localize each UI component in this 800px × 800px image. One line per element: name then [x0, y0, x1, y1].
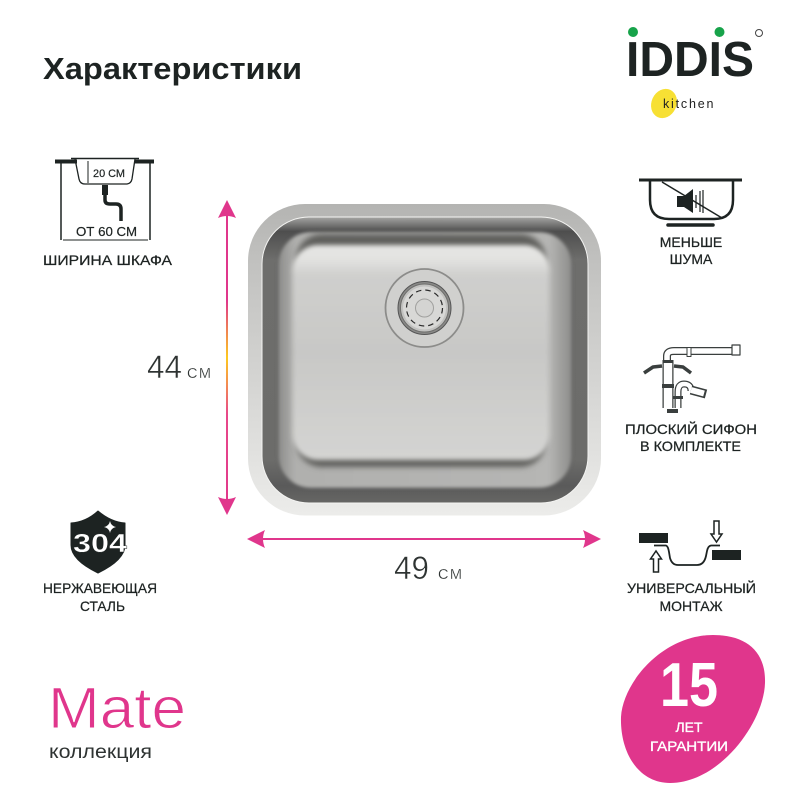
collection name: Mate — [48, 676, 186, 741]
arrow: depth 44 cm — [218, 200, 236, 515]
warranty badge: 15 — [660, 651, 718, 720]
collection name — [48, 676, 186, 763]
label: universal mounting: МОНТАЖ — [659, 598, 723, 614]
arrow: width 49 cm — [247, 530, 601, 548]
icon: flat siphon — [644, 345, 740, 413]
warranty badge: ЛЕТ — [675, 719, 703, 735]
label: universal mounting — [627, 579, 756, 614]
icon: less noise — [639, 180, 742, 225]
title: Характеристики — [43, 51, 302, 86]
label: 49 cm: СМ — [438, 567, 462, 583]
label: 44 cm: СМ — [187, 366, 211, 382]
icon: 304 shield — [71, 511, 128, 573]
label: less noise — [660, 234, 722, 267]
warranty badge: ГАРАНТИИ — [650, 738, 728, 754]
label: less noise: МЕНЬШЕ — [660, 234, 722, 250]
label: flat siphon: ПЛОСКИЙ СИФОН — [625, 420, 757, 437]
warranty badge — [621, 635, 765, 783]
label: less noise: ШУМА — [670, 251, 713, 267]
label: stainless steel: НЕРЖАВЕЮЩАЯ — [43, 580, 157, 596]
icon: cabinet width: 20 СМ — [93, 168, 125, 180]
overflow slot — [406, 220, 443, 222]
label: stainless steel: СТАЛЬ — [80, 598, 125, 614]
sink inner edge — [262, 217, 588, 503]
icon: universal mounting — [639, 521, 741, 572]
collection name: коллекция — [49, 742, 152, 763]
label: 49 cm: 49 — [394, 550, 429, 586]
sink illustration — [248, 204, 601, 516]
label: 44 cm — [147, 349, 211, 385]
sink bowl layers — [262, 217, 588, 503]
label: flat siphon: В КОМПЛЕКТЕ — [640, 438, 741, 454]
label: stainless steel — [43, 580, 157, 614]
label: universal mounting: УНИВЕРСАЛЬНЫЙ — [627, 579, 756, 596]
icon: cabinet width — [55, 158, 154, 240]
icon: cabinet width: ОТ 60 СМ — [76, 225, 137, 239]
sink outer rim — [248, 204, 601, 516]
logo: IDDIS kitchen: IDDIS — [626, 33, 754, 87]
label: 49 cm — [394, 550, 462, 586]
label: 44 cm: 44 — [147, 349, 182, 385]
label: cabinet width: ШИРИНА ШКАФА — [43, 252, 173, 268]
logo: IDDIS kitchen: kitchen — [663, 97, 715, 111]
icon: 304 shield: 304 — [73, 528, 128, 558]
label: flat siphon — [625, 420, 757, 454]
logo: IDDIS kitchen — [626, 27, 762, 122]
drain — [386, 269, 464, 347]
